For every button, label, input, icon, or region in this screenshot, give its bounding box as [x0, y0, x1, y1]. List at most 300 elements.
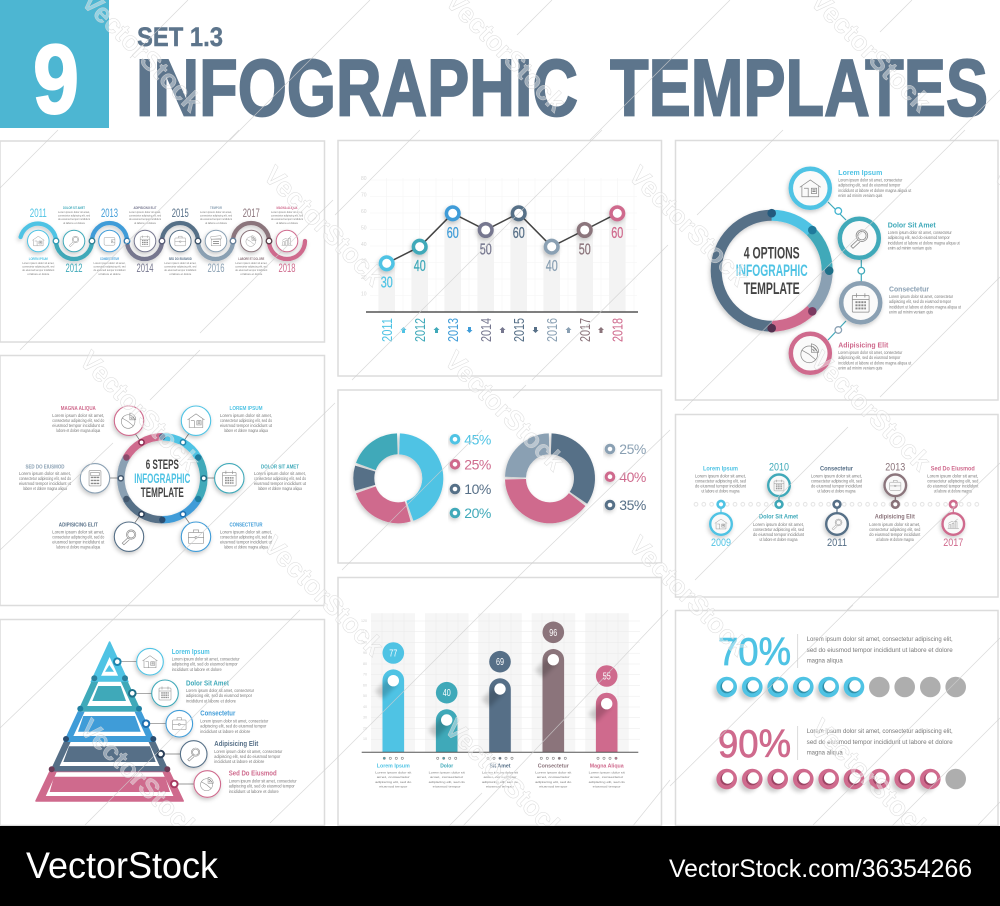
timeline body text: consectetur adipiscing elit, sed: [129, 214, 161, 218]
y axis labels: 90: [363, 651, 367, 655]
bar caption: Magna Aliqua: [589, 763, 625, 789]
step text: Lorem Ipsum: LOREM IPSUM: [230, 406, 263, 412]
panel: pyramid: [0, 620, 324, 826]
step text: Consectetur: eiusmod tempor incididunt ut: [220, 540, 273, 544]
centre title: INFOGRAPHIC: [736, 262, 808, 280]
data values: 50: [579, 242, 591, 258]
bar caption: Consectetur: Consectetur: [538, 763, 570, 769]
text: Dolor Sit Amet: consectetur adipiscing elit, sed: [753, 527, 805, 532]
ring joints: [123, 434, 201, 523]
panel: donut charts: [338, 390, 662, 563]
level text: Sed Do Eiusmod: incididunt ut labore et dolore: [229, 789, 279, 794]
bar: 40: [432, 682, 458, 752]
y axis labels: 80: [363, 662, 367, 666]
option: Lorem Ipsum: Lorem ipsum dolor sit amet, consectetur: [838, 178, 903, 182]
data points: [380, 207, 624, 270]
step text: Magna Aliqua: [52, 406, 105, 433]
option: Dolor Sit Amet: [888, 223, 960, 251]
timeline labels: LOREM IPSUM: [29, 257, 48, 261]
centre title: INFOGRAPHIC: [134, 470, 190, 486]
text: VectorStock: [623, 530, 755, 662]
step text: Adipisicing Elit: eiusmod tempor incididunt ut: [52, 540, 105, 544]
connectors: [828, 202, 861, 340]
bar caption: Lorem Ipsum: Lorem Ipsum: [377, 763, 410, 769]
option: Consectetur: Consectetur: [889, 287, 929, 294]
level text: Adipisicing Elit: incididunt ut labore et dolore: [214, 759, 265, 764]
year labels: 2017: [577, 318, 594, 342]
text: Lorem Ipsum: do eiusmod tempor incididunt: [695, 484, 747, 488]
step text: Magna Aliqua: MAGNA ALIQUA: [61, 406, 96, 412]
timeline body text: Lorem ipsum dolor sit amet,: [94, 261, 126, 265]
timeline years: 2014: [136, 263, 154, 275]
step text: Dolor Sit Amet: consectetur adipiscing elit, sed do: [254, 476, 307, 481]
timeline body text: Lorem ipsum dolor sit amet,: [200, 210, 232, 214]
text: VectorStock: [74, 345, 206, 477]
step ring: [106, 422, 219, 535]
timeline labels: CONSECTETUR: [100, 257, 119, 261]
bar caption: Consectetur: [535, 763, 572, 789]
bar: 69: [486, 651, 511, 752]
step text: Dolor Sit Amet: labore et dolore magna aliqua: [258, 486, 303, 491]
year labels: 2015: [511, 318, 528, 342]
ring joints: [767, 209, 834, 333]
timeline body text: Lorem ipsum dolor sit amet,: [271, 210, 303, 214]
bar caption: Lorem Ipsum: eiusmod tempor: [379, 785, 407, 789]
timeline body text: Lorem ipsum dolor sit amet,: [58, 210, 90, 214]
centre title: TEMPLATE: [141, 484, 184, 500]
milestone 2010: [768, 462, 790, 508]
centre title: [134, 456, 190, 500]
badge: number 9: [0, 0, 109, 134]
option circles: [791, 169, 880, 373]
footer bar: [0, 826, 1000, 906]
bar: 55: [592, 665, 618, 752]
text: Adipisicing Elit: do eiusmod tempor incididunt: [869, 532, 921, 537]
step text: Sed Do Eiusmod: consectetur adipiscing elit, sed do: [19, 476, 72, 481]
timeline body text: ut labore et dolore: [276, 221, 298, 225]
step text: Adipisicing Elit: consectetur adipiscing elit, sed do: [52, 534, 105, 540]
y axis labels: [361, 176, 367, 298]
level icons: [142, 656, 213, 791]
donut 1: [354, 434, 443, 523]
connector rings: [53, 238, 272, 244]
y axis labels: 80: [361, 176, 367, 182]
milestone 2011: [826, 501, 848, 549]
milestone 2013: 2013: [885, 462, 905, 474]
timeline body text: ut labore et dolore: [205, 221, 227, 225]
legend 2: [606, 441, 646, 513]
legend 2: 40%: [619, 469, 646, 485]
bar caption: Sit Amet: [482, 763, 518, 789]
connector lines: [117, 662, 198, 784]
text: Adipisicing Elit: [869, 515, 921, 542]
step text: Adipisicing Elit: labore et dolore magna aliqua: [56, 544, 101, 550]
data values: 30: [381, 274, 393, 292]
timeline years: 2013: [101, 208, 118, 220]
step circles: [80, 406, 244, 551]
stat: 70%: Lorem ipsum dolor sit amet, consectetur adipiscing elit,: [807, 636, 953, 643]
timeline body text: do eiusmod tempor incididunt: [200, 217, 232, 221]
timeline labels: [29, 206, 298, 261]
stat: 90%: sed do eiusmod tempor incididunt ut labore et dolore: [807, 739, 953, 746]
panel: percentage rings: [676, 610, 998, 826]
timeline body text: consectetur adipiscing elit, sed: [164, 265, 197, 269]
bar caption: Magna Aliqua: Magna Aliqua: [590, 763, 625, 769]
step icons: [89, 413, 236, 545]
x axis: [362, 751, 638, 753]
bar caption: Lorem Ipsum: [375, 763, 412, 789]
option: Adipisicing Elit: adipiscing elit, sed do eiusmod tempor: [838, 355, 901, 360]
option: Dolor Sit Amet: adipiscing elit, sed do eiusmod tempor: [888, 235, 950, 240]
bar caption: Dolor: Lorem ipsum dolor sit: [429, 770, 465, 774]
step text: Consectetur: CONSECTETUR: [230, 523, 262, 529]
option icons: [800, 180, 869, 363]
level text: Adipisicing Elit: Lorem ipsum dolor sit amet, consectetur: [214, 749, 283, 754]
level text: Adipisicing Elit: adipiscing elit, sed do eiusmod tempor: [214, 754, 281, 759]
option: Consectetur: adipiscing elit, sed do eiusmod tempor: [889, 299, 952, 304]
stat: 70%: 70%: [718, 631, 791, 674]
bar caption: Consectetur: eiusmod tempor: [539, 785, 567, 789]
text: Dolor Sit Amet: Dolor Sit Amet: [759, 515, 798, 521]
timeline body text: do eiusmod tempor incididunt: [129, 217, 161, 221]
ring row: 70%: [714, 677, 966, 700]
level text: Dolor Sit Amet: Dolor Sit Amet: [186, 680, 230, 687]
option: Consectetur: enim ad minim veniam quis: [889, 310, 933, 315]
y axis labels: 20: [361, 275, 367, 281]
step text: Magna Aliqua: eiusmod tempor incididunt ut: [52, 423, 105, 428]
panel: 4 options circle: [676, 140, 998, 400]
bar caption: Dolor: [429, 763, 465, 789]
pyramid joints: [49, 675, 170, 772]
y axis labels: 30: [363, 716, 367, 720]
stat: 90%: 90%: [718, 723, 791, 766]
level text: Sed Do Eiusmod: Sed Do Eiusmod: [229, 771, 277, 778]
stat: 70%: sed do eiusmod tempor incididunt ut labore et dolore: [807, 647, 953, 654]
step text: Magna Aliqua: Lorem ipsum dolor sit amet,: [52, 413, 104, 418]
pager dots: [383, 757, 617, 759]
step text: Lorem Ipsum: consectetur adipiscing elit, sed do: [220, 418, 273, 423]
timeline years: 2011: [30, 208, 47, 220]
timeline icons: [32, 236, 292, 247]
y axis labels: 30: [361, 258, 367, 264]
text: VectorStock: [439, 345, 571, 477]
level text: Adipisicing Elit: Adipisicing Elit: [214, 741, 259, 748]
panel: line chart: [338, 140, 662, 376]
year labels: 2016: [544, 318, 561, 342]
y axis labels: 120: [361, 619, 367, 623]
level text: Sed Do Eiusmod: adipiscing elit, sed do eiusmod tempor: [229, 784, 295, 789]
level text: Sed Do Eiusmod: Lorem ipsum dolor sit amet, consectetur: [229, 778, 297, 784]
step text: Lorem Ipsum: [220, 406, 273, 433]
y axis labels: 70: [363, 673, 367, 677]
data values: 50: [480, 242, 492, 258]
option: Adipisicing Elit: [838, 343, 912, 371]
step text: Lorem Ipsum: eiusmod tempor incididunt ut: [220, 423, 273, 428]
timeline body text: ut labore et dolore: [27, 272, 50, 276]
text: Sed Do Eiusmod: [927, 466, 979, 494]
bar caption: Dolor: amet, consectetur: [430, 775, 463, 779]
level text: Sed Do Eiusmod: [229, 771, 297, 794]
option: Dolor Sit Amet: incididunt ut labore et dolore magna aliqua ut: [888, 240, 960, 245]
bar: 77: [379, 642, 404, 752]
y axis labels: 10: [361, 292, 367, 298]
option: Dolor Sit Amet: Dolor Sit Amet: [888, 223, 936, 230]
panel: bar chart: [338, 578, 662, 826]
bar caption: Magna Aliqua: eiusmod tempor: [593, 785, 621, 789]
text: VectorStock: [623, 160, 755, 292]
step text: Dolor Sit Amet: eiusmod tempor incididunt ut: [254, 481, 307, 486]
level text: Lorem Ipsum: adipiscing elit, sed do eiusmod tempor: [172, 662, 238, 667]
option: Adipisicing Elit: Adipisicing Elit: [838, 343, 889, 350]
bar: 69: 69: [496, 657, 504, 668]
step text: Sed Do Eiusmod: Lorem ipsum dolor sit amet,: [19, 471, 71, 476]
text: Lorem Ipsum: ut labore et dolore magna: [702, 488, 740, 494]
level text: Lorem Ipsum: incididunt ut labore et dolore: [172, 667, 222, 672]
timeline body text: consectetur adipiscing elit, sed: [22, 265, 55, 269]
y axis labels: 20: [363, 726, 367, 730]
text: Sed Do Eiusmod: do eiusmod tempor incididunt: [927, 484, 979, 488]
timeline years: 2016: [208, 263, 224, 275]
milestone 2017: [942, 501, 964, 549]
timeline body text: Lorem ipsum dolor sit amet,: [235, 261, 267, 265]
text: Dolor Sit Amet: [753, 515, 805, 542]
timeline body text: Lorem ipsum dolor sit amet,: [129, 210, 161, 214]
icon circles: [28, 230, 298, 252]
header: [0, 0, 988, 134]
step text: Lorem Ipsum: labore et dolore magna aliqua: [224, 428, 269, 433]
pyramid shape: [36, 642, 183, 801]
timeline body text: consectetur adipiscing elit, sed: [58, 214, 90, 218]
option: Consectetur: Lorem ipsum dolor sit amet, consectetur: [889, 294, 954, 299]
timeline body text: do eiusmod tempor incididunt: [235, 268, 267, 272]
level text: Consectetur: incididunt ut labore et dolore: [200, 729, 251, 734]
main ring: [693, 192, 850, 349]
donut 2: [502, 430, 598, 527]
text: Lorem Ipsum: Lorem Ipsum: [703, 466, 738, 472]
y axis labels: 50: [361, 226, 367, 232]
panel: dotted timeline: [676, 414, 998, 597]
data values: 60: [447, 225, 459, 242]
y axis labels: 110: [361, 630, 367, 634]
timeline body text: ut labore et dolore: [63, 221, 85, 225]
text: Dolor Sit Amet: do eiusmod tempor incididunt: [753, 532, 805, 537]
timeline labels: ADIPISICING ELIT: [134, 206, 157, 210]
subtitle: SET 1.3: [137, 22, 223, 52]
milestone 2017: 2017: [943, 537, 963, 549]
timeline labels: SED DO EIUSMOD: [169, 257, 192, 261]
timeline body text: ut labore et dolore: [169, 272, 192, 276]
option: Lorem Ipsum: [838, 170, 912, 198]
text: Lorem Ipsum: Lorem ipsum dolor sit amet,: [695, 474, 746, 478]
panel: 6 steps circle: [0, 356, 324, 606]
y axis labels: 100: [361, 640, 367, 644]
y axis labels: 60: [363, 684, 367, 688]
bar: 96: 96: [549, 628, 558, 639]
year labels: [379, 318, 626, 342]
timeline labels: DOLOR SIT AMET: [63, 206, 85, 210]
text: Lorem Ipsum: [695, 466, 747, 494]
legend 1: 25%: [464, 456, 491, 472]
bar caption: Sit Amet: amet, consectetur: [484, 775, 516, 779]
step text: Magna Aliqua: labore et dolore magna aliqua: [56, 428, 101, 433]
data values: [381, 225, 623, 292]
level text: Lorem Ipsum: [172, 649, 240, 672]
bar caption: Magna Aliqua: adipiscing elit, sed do: [589, 780, 625, 784]
text: VectorStock: [439, 713, 571, 845]
bar caption: Sit Amet: adipiscing elit, sed do: [482, 780, 518, 784]
year labels: 2011: [379, 318, 396, 342]
timeline labels: MAGNA ALIQUA: [276, 206, 298, 210]
y axis labels: 50: [363, 694, 367, 698]
timeline body text: do eiusmod tempor incididunt: [164, 268, 196, 272]
timeline body text: consectetur adipiscing elit, sed: [271, 214, 303, 218]
step text: Consectetur: labore et dolore magna aliqua: [224, 544, 269, 550]
step text: Sed Do Eiusmod: labore et dolore magna aliqua: [23, 486, 68, 491]
step text: Adipisicing Elit: [52, 523, 105, 550]
bar caption: Magna Aliqua: Lorem ipsum dolor sit: [589, 770, 625, 774]
bar caption: Consectetur: amet, consectetur: [537, 775, 570, 779]
step text: Dolor Sit Amet: DOLOR SIT AMET: [261, 464, 299, 470]
text: VectorStock: [805, 713, 937, 845]
title: [136, 44, 988, 134]
footer logo: VectorStock: [26, 845, 218, 886]
centre title: 4 OPTIONS: [744, 244, 800, 262]
wave arcs: [21, 223, 305, 259]
option: Lorem Ipsum: incididunt ut labore et dolore magna aliqua ut: [838, 188, 912, 193]
legend 1: 45%: [464, 432, 491, 448]
timeline body text: ut labore et dolore: [134, 221, 156, 225]
bar: 40: 40: [443, 688, 451, 699]
text: VectorStock: [805, 345, 937, 477]
stat: 90%: Lorem ipsum dolor sit amet, consectetur adipiscing elit,: [807, 728, 953, 735]
text: VectorStock: [74, 713, 206, 845]
milestone 2009: 2009: [711, 537, 731, 549]
milestone 2009: [710, 501, 732, 549]
y axis labels: 70: [361, 192, 367, 198]
badge: number 9: 9: [33, 24, 79, 134]
timeline years: 2015: [172, 208, 189, 220]
step text: Adipisicing Elit: Lorem ipsum dolor sit amet,: [52, 530, 104, 534]
legend 1: 20%: [464, 505, 491, 521]
data values: 60: [513, 225, 525, 242]
text: Sed Do Eiusmod: Sed Do Eiusmod: [931, 466, 975, 472]
column backgrounds: [371, 613, 629, 752]
bar caption: Lorem Ipsum: adipiscing elit, sed do: [375, 780, 412, 784]
text: Dolor Sit Amet: Lorem ipsum dolor sit amet,: [753, 522, 804, 527]
y axis labels: 60: [361, 209, 367, 215]
option: Consectetur: [889, 287, 962, 315]
trend arrows: [400, 327, 604, 333]
level text: Dolor Sit Amet: incididunt ut labore et dolore: [186, 698, 237, 703]
option: Adipisicing Elit: enim ad minim veniam quis: [838, 366, 882, 371]
bar caption: Consectetur: adipiscing elit, sed do: [535, 780, 572, 784]
centre title: 6 STEPS: [146, 456, 179, 472]
legend 2: 25%: [619, 441, 646, 457]
step text: Consectetur: consectetur adipiscing elit, sed do: [220, 534, 273, 540]
level text: Adipisicing Elit: [214, 741, 283, 764]
timeline body text: Lorem ipsum dolor sit amet,: [22, 261, 54, 265]
milestone 2013: [884, 462, 906, 508]
text: Consectetur: Lorem ipsum dolor sit amet,: [811, 474, 862, 478]
text: Adipisicing Elit: ut labore et dolore magna: [876, 537, 914, 542]
timeline body text: [22, 210, 303, 276]
timeline body text: consectetur adipiscing elit, sed: [235, 265, 268, 269]
timeline body text: do eiusmod tempor incididunt: [58, 217, 90, 221]
timeline body text: ut labore et dolore: [240, 272, 263, 276]
bar caption: Lorem Ipsum: Lorem ipsum dolor sit: [375, 770, 411, 774]
option: Consectetur: incididunt ut labore et dolore magna aliqua ut: [889, 304, 962, 309]
text: Dolor Sit Amet: ut labore et dolore magna: [760, 537, 798, 542]
year labels: 2018: [610, 318, 626, 342]
legend 2: 35%: [619, 497, 646, 513]
bar caption: Sit Amet: eiusmod tempor: [486, 785, 514, 789]
level text: Consectetur: [200, 711, 269, 734]
ring row: 90%: [714, 769, 966, 792]
data values: 40: [414, 258, 426, 275]
footer url: VectorStock.com/36354266: [669, 855, 972, 883]
text: Consectetur: do eiusmod tempor incididunt: [811, 484, 863, 488]
text: Sed Do Eiusmod: Lorem ipsum dolor sit amet,: [927, 474, 978, 478]
legend 1: [451, 432, 491, 521]
bar caption: Dolor: adipiscing elit, sed do: [429, 780, 465, 784]
step text: Consectetur: [220, 523, 273, 550]
centre title: TEMPLATE: [744, 280, 800, 298]
pyramid rings: [114, 658, 178, 787]
option: Dolor Sit Amet: Lorem ipsum dolor sit amet, consectetur: [888, 230, 952, 235]
step text: Sed Do Eiusmod: [19, 464, 72, 491]
timeline body text: do eiusmod tempor incididunt: [22, 268, 54, 272]
y axis labels: [361, 619, 367, 741]
level text: Dolor Sit Amet: [186, 680, 255, 703]
milestone 2010: 2010: [769, 462, 789, 474]
step text: Lorem Ipsum: Lorem ipsum dolor sit amet,: [220, 413, 272, 418]
level text: Dolor Sit Amet: adipiscing elit, sed do eiusmod tempor: [186, 693, 253, 698]
bar caption: Dolor: eiusmod tempor: [433, 785, 461, 789]
data values: 40: [546, 258, 558, 275]
timeline years: 2012: [66, 263, 82, 275]
timeline body text: ut labore et dolore: [98, 272, 121, 276]
y axis labels: 10: [363, 737, 367, 741]
text: Consectetur: consectetur adipiscing elit, sed: [811, 478, 863, 484]
level text: Consectetur: Lorem ipsum dolor sit amet, consectetur: [200, 718, 269, 724]
text: Consectetur: [811, 466, 863, 494]
year labels: 2014: [478, 318, 495, 342]
option: Adipisicing Elit: incididunt ut labore et dolore magna aliqua ut: [838, 360, 912, 365]
columns: [378, 213, 626, 312]
text: Lorem Ipsum: consectetur adipiscing elit, sed: [695, 478, 747, 484]
text: Sed Do Eiusmod: consectetur adipiscing elit, sed: [927, 478, 979, 484]
text: Adipisicing Elit: Adipisicing Elit: [875, 515, 915, 521]
bar: 77: 77: [389, 648, 398, 660]
timeline labels: TEMPOR: [210, 206, 222, 210]
stat: 70%: [718, 631, 953, 674]
step text: Adipisicing Elit: ADIPISICING ELIT: [59, 523, 98, 529]
centre title: [736, 244, 808, 298]
level text: Lorem Ipsum: Lorem ipsum dolor sit amet, consectetur: [172, 656, 240, 662]
option: Lorem Ipsum: enim ad minim veniam quis: [838, 193, 882, 198]
year labels: 2012: [412, 318, 429, 342]
level text: Lorem Ipsum: Lorem Ipsum: [172, 649, 210, 656]
step text: Dolor Sit Amet: [254, 464, 307, 491]
step text: Magna Aliqua: consectetur adipiscing elit, sed do: [52, 418, 105, 423]
bar caption: Magna Aliqua: amet, consectetur: [590, 775, 623, 779]
timeline body text: consectetur adipiscing elit, sed: [94, 265, 126, 269]
stat: 70%: magna aliqua: [807, 658, 843, 664]
text: Adipisicing Elit: consectetur adipiscing elit, sed: [869, 527, 921, 532]
level circles: [137, 648, 221, 797]
text: Adipisicing Elit: Lorem ipsum dolor sit amet,: [869, 522, 920, 527]
title: INFOGRAPHIC: [136, 44, 578, 134]
